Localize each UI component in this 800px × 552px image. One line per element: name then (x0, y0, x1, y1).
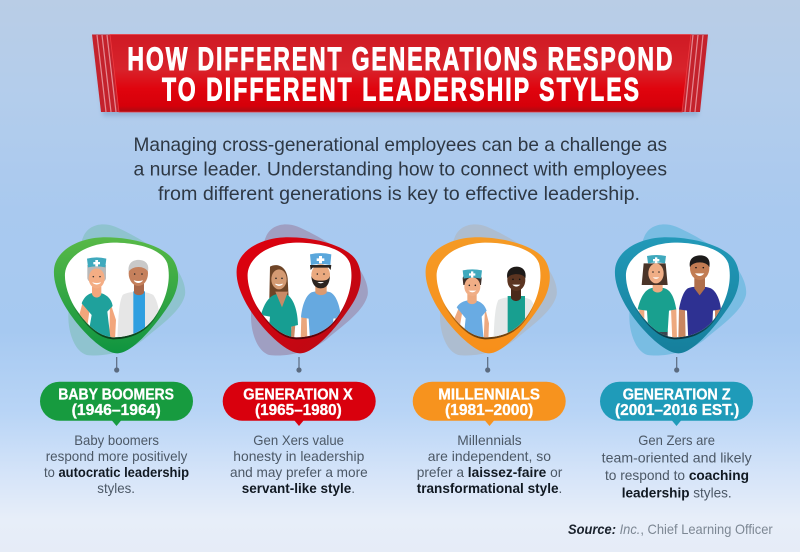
description: servant-like style. (242, 480, 355, 496)
connector (296, 357, 302, 373)
description: styles. (97, 480, 135, 496)
description (44, 432, 189, 496)
title line 2: TO DIFFERENT LEADERSHIP STYLES (162, 72, 639, 107)
description (230, 432, 368, 496)
description: and may prefer a more (230, 464, 368, 480)
illustration: gen x nurse pair (237, 224, 368, 355)
panel: generation x (223, 224, 376, 496)
description: Gen Xers value (253, 432, 344, 448)
label pill (600, 382, 753, 426)
description (417, 432, 563, 496)
illustration: millennial nurse and doctor (426, 224, 557, 355)
description: Baby boomers (74, 432, 159, 448)
illustration: gen z nurse pair (615, 224, 746, 355)
description: respond more positively (46, 448, 187, 464)
label pill: (2001–2016 EST.) (615, 402, 739, 419)
description: leadership styles. (622, 484, 732, 500)
description: Millennials (457, 432, 522, 448)
description: to autocratic leadership (44, 464, 189, 480)
description: Gen Zers are (638, 432, 715, 448)
intro paragraph (134, 134, 667, 205)
label pill: (1965–1980) (255, 402, 342, 419)
label pill: MILLENNIALS (438, 386, 540, 403)
description (602, 432, 752, 500)
source credit: Source: Inc., Chief Learning Officer (568, 521, 773, 537)
label pill: GENERATION X (243, 386, 353, 403)
title banner (92, 34, 708, 116)
label pill (223, 382, 376, 426)
panel: generation z (600, 224, 753, 500)
label pill (413, 382, 566, 426)
label pill: (1946–1964) (72, 402, 161, 419)
illustration: boomers nurse and doctor (54, 224, 185, 355)
description: transformational style. (417, 480, 562, 496)
intro paragraph: a nurse leader. Understanding how to connect with employees (134, 158, 667, 180)
description: team-oriented and likely (602, 450, 752, 466)
connector (114, 357, 119, 373)
label pill: (1981–2000) (445, 402, 533, 419)
panel: millennials (413, 224, 566, 496)
intro paragraph: from different generations is key to effective leadership. (158, 183, 640, 205)
description: are independent, so (428, 448, 551, 464)
label pill: GENERATION Z (623, 386, 731, 403)
panel: baby boomers (40, 224, 193, 496)
description: to respond to coaching (605, 467, 749, 483)
description: prefer a laissez-faire or (417, 464, 563, 480)
intro paragraph: Managing cross-generational employees can be a challenge as (134, 134, 667, 156)
connector (674, 357, 679, 373)
description: honesty in leadership (233, 448, 365, 464)
label pill (40, 382, 193, 426)
title line 1: HOW DIFFERENT GENERATIONS RESPOND (127, 41, 672, 77)
label pill: BABY BOOMERS (58, 386, 174, 403)
connector (485, 357, 490, 373)
